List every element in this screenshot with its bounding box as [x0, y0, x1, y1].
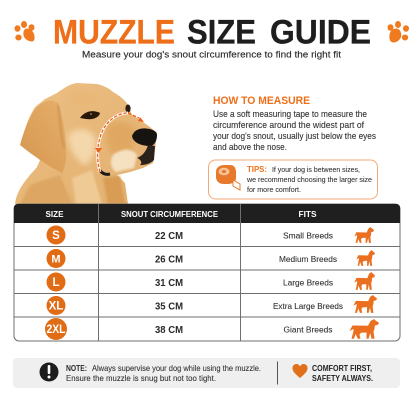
title: GUIDE: [270, 14, 371, 52]
panel: tips: If your dog is between sizes,: [272, 165, 360, 174]
muzzle white fur: [111, 150, 137, 172]
row M: Medium Breeds: [279, 254, 337, 264]
tape loop: [98, 113, 128, 172]
row M: M: [51, 254, 61, 266]
icon: right paw: [388, 21, 409, 43]
dog silhouette: [15, 83, 157, 204]
text: how to measure instructions: and above the nose.: [213, 142, 287, 152]
row L: 31 CM: [155, 278, 183, 289]
table header: FITS: [298, 209, 317, 219]
panel: note bar: [13, 358, 400, 388]
panel: note bar: Always supervise your dog while using the muzzle.: [92, 364, 261, 373]
text: how to measure instructions: [213, 109, 377, 152]
text: how to measure instructions: Use a soft measuring tape to measure the: [213, 109, 367, 119]
collar strap: [99, 169, 110, 174]
row 2XL: 38 CM: [155, 325, 183, 336]
row S: Small Breeds: [283, 230, 333, 240]
row S: 22 CM: [155, 231, 183, 242]
row 2XL: Giant Breeds: [284, 324, 332, 334]
panel: note bar: Ensure the muzzle is snug but not too tight.: [66, 374, 216, 383]
panel: note bar: SAFETY ALWAYS.: [312, 374, 373, 383]
icon: heart: [292, 364, 308, 378]
row XL: [46, 295, 377, 315]
panel: tips: we recommend choosing the larger size: [246, 175, 372, 184]
row L: Large Breeds: [283, 278, 333, 288]
row XL: XL: [49, 300, 63, 312]
table header: SIZE: [46, 209, 64, 219]
row S: S: [52, 230, 60, 242]
panel: tips: for more comfort.: [247, 185, 301, 194]
title: [53, 14, 371, 52]
row S: [46, 226, 374, 244]
illustration: golden retriever with measuring tape: [15, 83, 157, 204]
title: MUZZLE: [53, 14, 175, 52]
eyes: [80, 104, 131, 119]
row 2XL: [45, 318, 379, 340]
row XL: Extra Large Breeds: [273, 301, 343, 311]
subtitle: Measure your dog's snout circumference to find the right fit: [82, 50, 341, 60]
row L: [46, 272, 375, 292]
icon: exclamation: [40, 362, 58, 382]
heading: how to measure: HOW TO MEASURE: [213, 95, 310, 107]
ear fold shadow: [58, 105, 64, 148]
text: how to measure instructions: your dog's snout, usually just below the eyes: [213, 131, 377, 141]
size table: [14, 204, 400, 341]
face highlights: [66, 90, 136, 165]
tips text: TIPS:: [247, 164, 267, 174]
panel: tips: [208, 160, 378, 199]
chest shading: [20, 170, 125, 204]
icon: left paw: [14, 21, 35, 41]
comfort text: COMFORT FIRST,: [312, 364, 372, 373]
ear: [20, 101, 66, 173]
table header: [14, 204, 400, 223]
icon: measuring tape: [216, 165, 240, 190]
row 2XL: 2XL: [46, 324, 66, 336]
nose and mouth: [132, 128, 157, 165]
row M: 26 CM: [155, 254, 183, 266]
row L: L: [52, 277, 60, 289]
row XL: 35 CM: [155, 302, 183, 312]
row M: [46, 249, 375, 268]
text: how to measure instructions: circumference around the widest part of: [213, 120, 365, 130]
note text: NOTE:: [66, 364, 87, 373]
title: SIZE: [187, 14, 256, 52]
table header: SNOUT CIRCUMFERENCE: [121, 209, 218, 219]
